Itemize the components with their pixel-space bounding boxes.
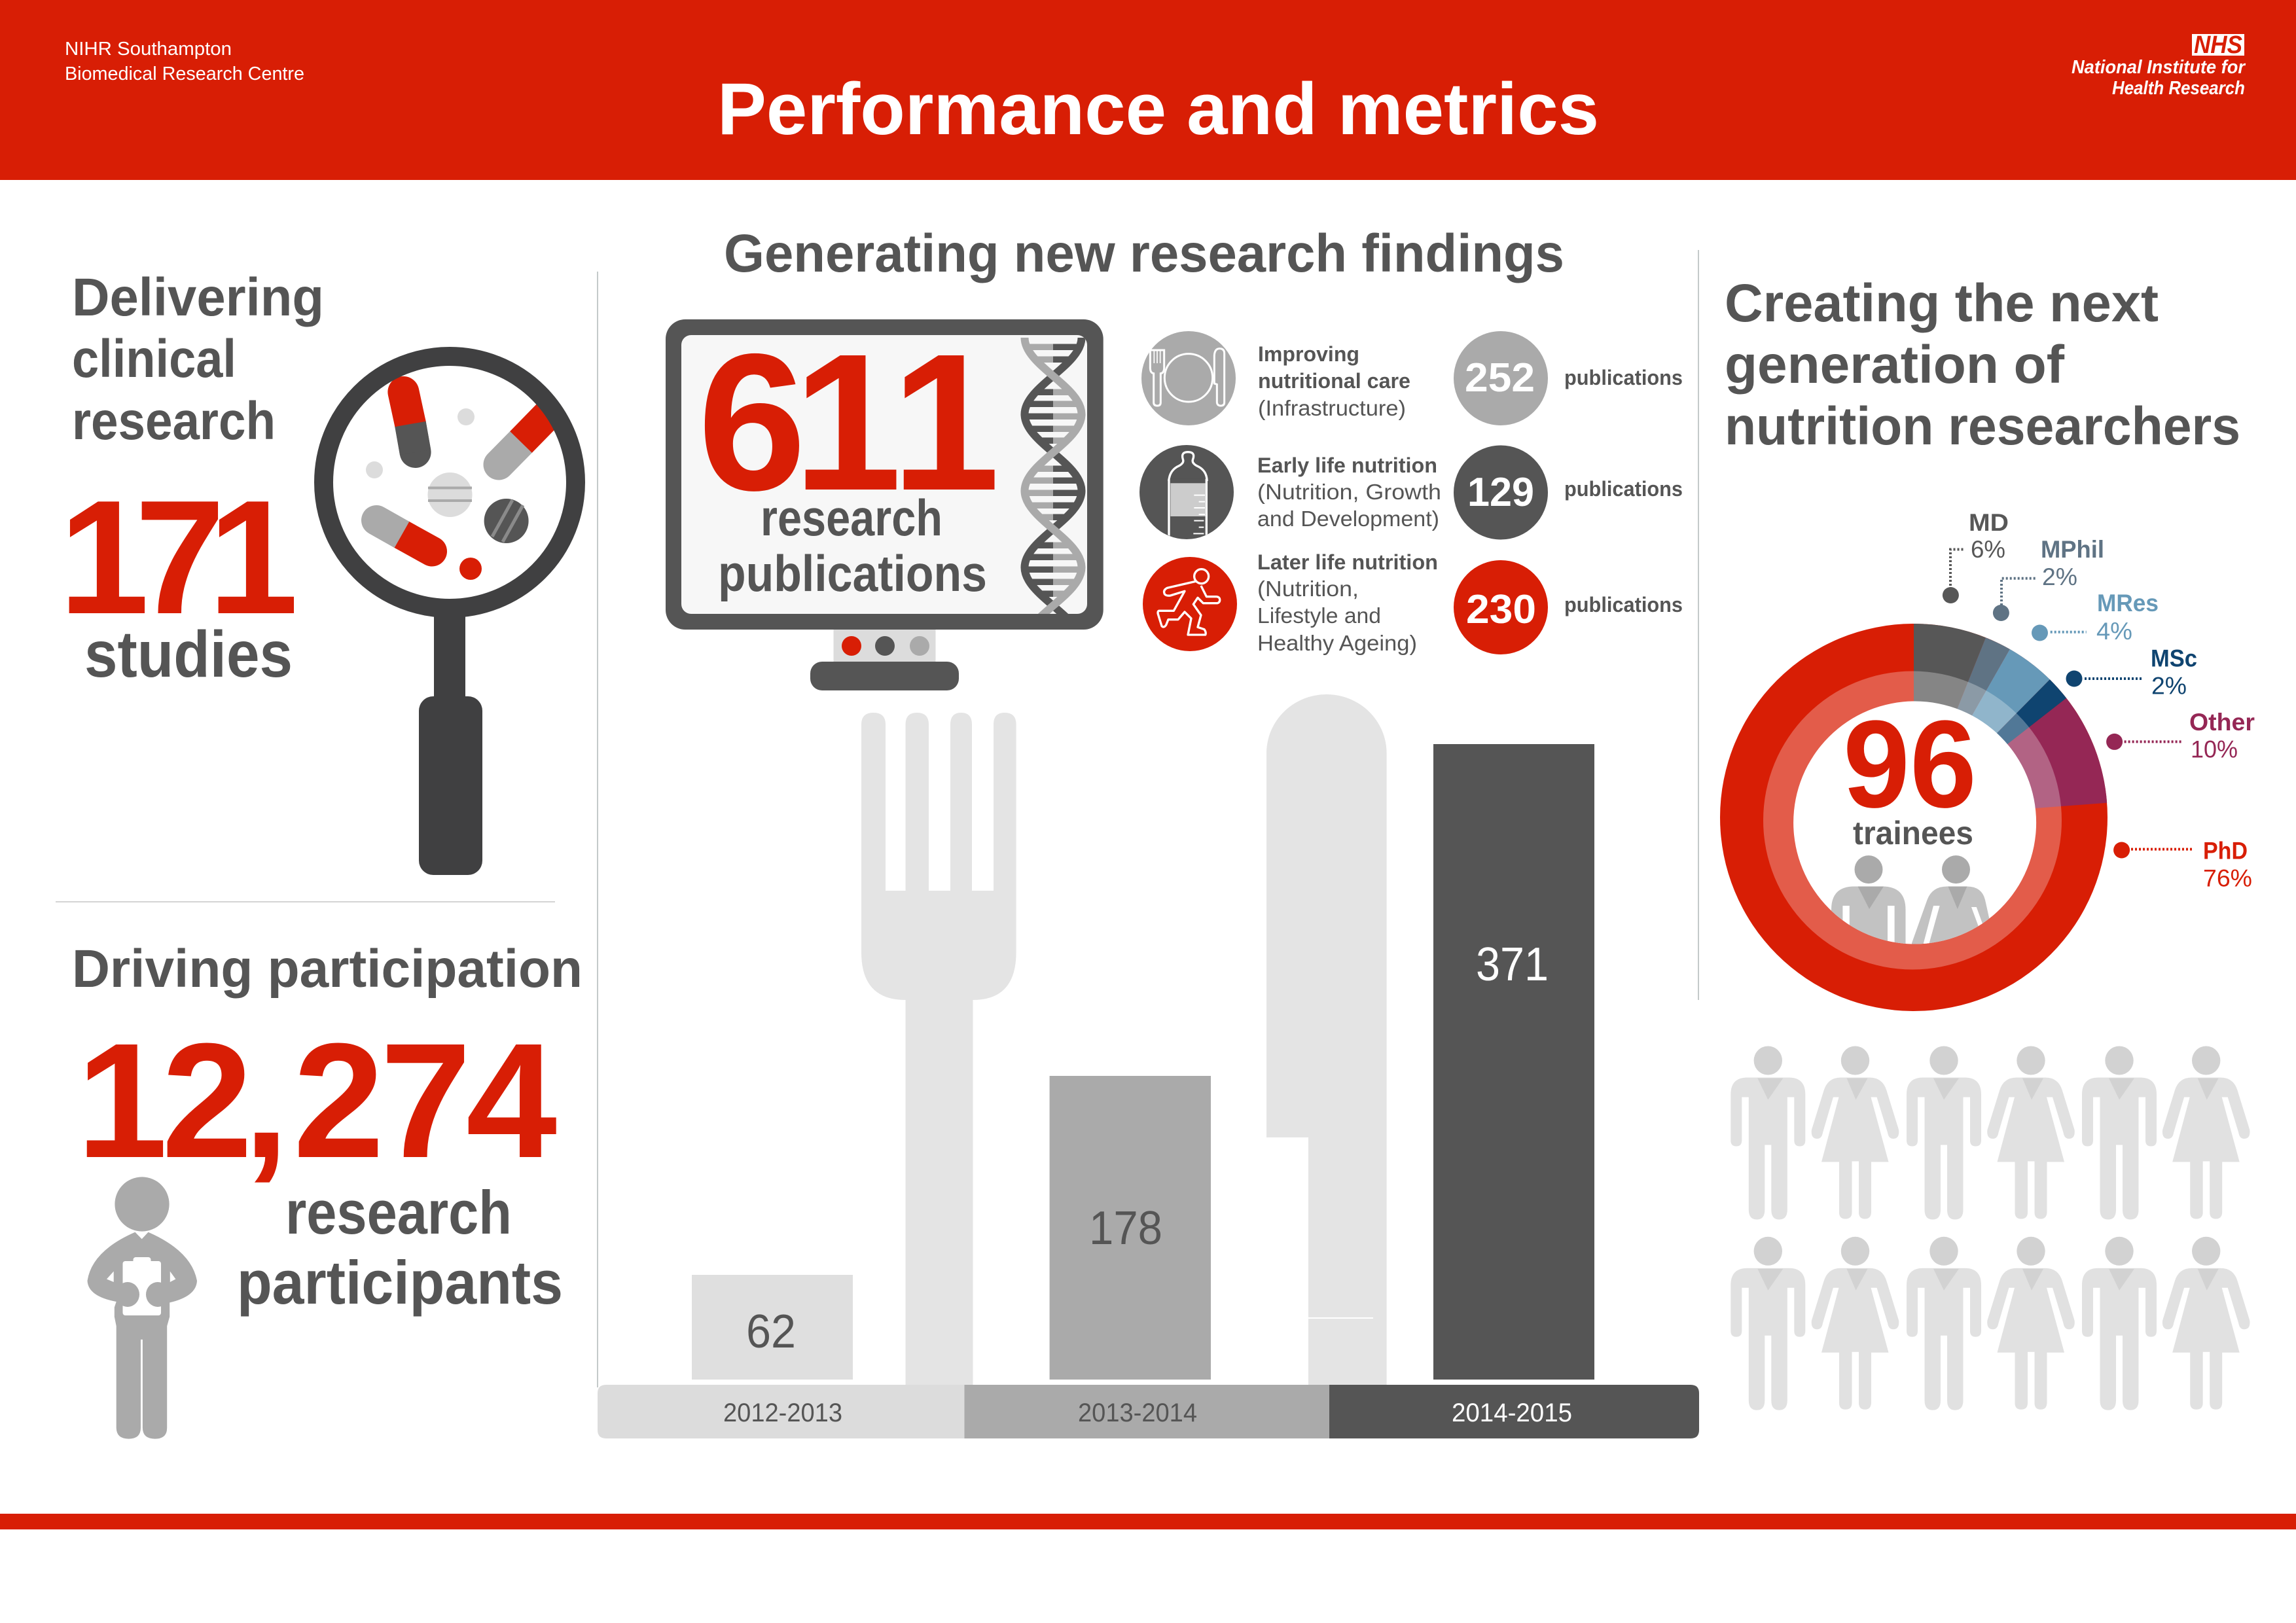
stat: 252 publications: publications (1564, 366, 1683, 389)
bar: 2014-2015: 371 (1476, 938, 1549, 991)
monitor with 611 research publications (666, 313, 1103, 690)
row: early life nutrition (1139, 445, 1683, 541)
heading: delivering clinical research: research (72, 391, 276, 451)
stat: 129 publications (1454, 445, 1683, 539)
label: improving nutritional care (1258, 342, 1410, 420)
label: improving nutritional care: (Infrastructure) (1258, 396, 1406, 420)
icon: knife background (1266, 694, 1387, 1385)
label: research publications: research (761, 489, 942, 546)
heading: creating the next generation of nutrition researchers: Creating the next (1725, 274, 2159, 333)
NHS NIHR logo (2072, 31, 2246, 99)
callout: MPhil 2%: 2% (2042, 563, 2077, 590)
NHS NIHR logo: Health Research (2112, 78, 2245, 99)
callout: MRes 4% (2032, 590, 2159, 645)
bar: 2012-2013: 62 (746, 1306, 796, 1358)
panel: creating the next generation (1720, 274, 2255, 1410)
icon: baby bottle (1139, 445, 1234, 541)
stat: 171: 171 (59, 466, 298, 648)
icon: running person (1143, 557, 1237, 651)
axis segment: 2014-2015 (1329, 1385, 1699, 1438)
stat: 230 publications: publications (1564, 593, 1683, 616)
heading: driving participation: Driving participation (72, 939, 583, 999)
organisation name (65, 39, 304, 84)
label: research participants (237, 1178, 563, 1317)
heading: delivering clinical research: clinical (72, 329, 236, 389)
label: research participants: participants (237, 1248, 563, 1317)
stat: 129 publications: publications (1564, 477, 1683, 501)
label: research publications (718, 489, 987, 602)
footer band (0, 1514, 2296, 1529)
callout: PhD 76%: PhD (2203, 838, 2248, 864)
heading: delivering clinical research (72, 268, 324, 451)
callout: MD 6%: 6% (1971, 536, 2005, 563)
panel: generating new research findings (598, 224, 1699, 1438)
heading: creating the next generation of nutrition researchers: nutrition researchers (1725, 397, 2240, 456)
bar: 2013-2014 (1050, 1076, 1211, 1380)
stat: 96: 96 (1843, 695, 1977, 834)
NHS NIHR logo: NHS (2194, 31, 2242, 59)
panel: delivering clinical research (59, 268, 576, 875)
label: improving nutritional care: Improving (1258, 342, 1359, 366)
bar: 2013-2014: 178 (1089, 1202, 1162, 1255)
title: Performance and metrics (717, 68, 1599, 150)
stat: 252 publications: 252 (1465, 355, 1535, 401)
stat: 230 publications (1454, 560, 1683, 654)
callout: MSc 2% (2066, 645, 2197, 699)
icon: person with clipboard (88, 1177, 197, 1439)
label: later life nutrition: Healthy Ageing) (1257, 631, 1417, 655)
row: improving nutritional care (1141, 331, 1683, 425)
label: early life nutrition (1257, 454, 1441, 531)
axis segment: 2012-2013 (598, 1385, 965, 1438)
stat: 12,274: 12,274 (77, 1009, 557, 1192)
callout: MPhil 2% (1993, 536, 2104, 621)
icon: magnifying glass with pills (323, 356, 576, 875)
row: later life nutrition (1143, 550, 1683, 655)
header banner (0, 0, 2296, 180)
callout: MRes 4%: 4% (2096, 618, 2132, 645)
icon: DNA helix (1025, 338, 1081, 644)
organisation name: NIHR Southampton (65, 39, 232, 60)
stat: 611: 611 (698, 313, 1000, 531)
callout: MSc 2%: MSc (2151, 645, 2197, 672)
stat: 252 publications (1454, 331, 1683, 425)
axis segment: 2013-2014: 2013-2014 (1078, 1399, 1197, 1427)
pictogram: rows of people (1731, 1046, 2250, 1410)
callout: MRes 4%: MRes (2097, 590, 2159, 616)
stat: 230 publications: 230 (1466, 587, 1536, 632)
label: later life nutrition: Lifestyle and (1257, 603, 1381, 628)
NHS NIHR logo: National Institute for (2072, 57, 2246, 78)
label: research participants: research (285, 1178, 512, 1247)
callout: MSc 2%: 2% (2151, 673, 2187, 699)
callout: MPhil 2%: MPhil (2041, 536, 2104, 563)
icon: plate with fork and knife (1141, 331, 1236, 425)
axis segment: 2012-2013: 2012-2013 (723, 1399, 842, 1427)
bar: 2012-2013 (692, 1275, 853, 1380)
callout: PhD 76% (2113, 838, 2252, 891)
axis segment: 2014-2015: 2014-2015 (1452, 1399, 1572, 1427)
axis segment: 2013-2014 (965, 1385, 1329, 1438)
callout: MD 6% (1943, 509, 2009, 603)
callout: Other 10%: 10% (2191, 736, 2238, 763)
callout: Other 10% (2106, 709, 2255, 763)
label: later life nutrition (1257, 550, 1438, 655)
label: later life nutrition: Later life nutrition (1257, 550, 1438, 574)
heading: creating the next generation of nutrition researchers: generation of (1725, 335, 2065, 395)
donut chart: trainee degree types (1720, 624, 2108, 1011)
heading: generating new research findings: Generating new research findings (724, 224, 1564, 283)
bar chart: publications per year (598, 744, 1699, 1438)
label: trainees: trainees (1853, 815, 1973, 851)
stat: 129 publications: 129 (1467, 470, 1534, 515)
panel: driving participation (72, 939, 583, 1439)
callout: MD 6%: MD (1969, 509, 2009, 536)
heading: creating the next generation of nutrition researchers (1725, 274, 2240, 456)
icon: two trainees (1831, 855, 1992, 949)
bar: 2014-2015 (1433, 744, 1594, 1380)
label: studies: studies (84, 618, 293, 691)
callout: Other 10%: Other (2189, 709, 2255, 736)
label: early life nutrition: and Development) (1257, 507, 1439, 531)
label: research publications: publications (718, 544, 987, 602)
label: later life nutrition: (Nutrition, (1257, 577, 1359, 601)
icon: fork background (861, 713, 1016, 1385)
label: early life nutrition: (Nutrition, Growth (1257, 480, 1441, 504)
label: early life nutrition: Early life nutrition (1257, 454, 1437, 477)
label: improving nutritional care: nutritional care (1258, 369, 1410, 393)
callout: PhD 76%: 76% (2203, 865, 2252, 891)
organisation name: Biomedical Research Centre (65, 63, 304, 84)
heading: delivering clinical research: Delivering (72, 268, 324, 327)
